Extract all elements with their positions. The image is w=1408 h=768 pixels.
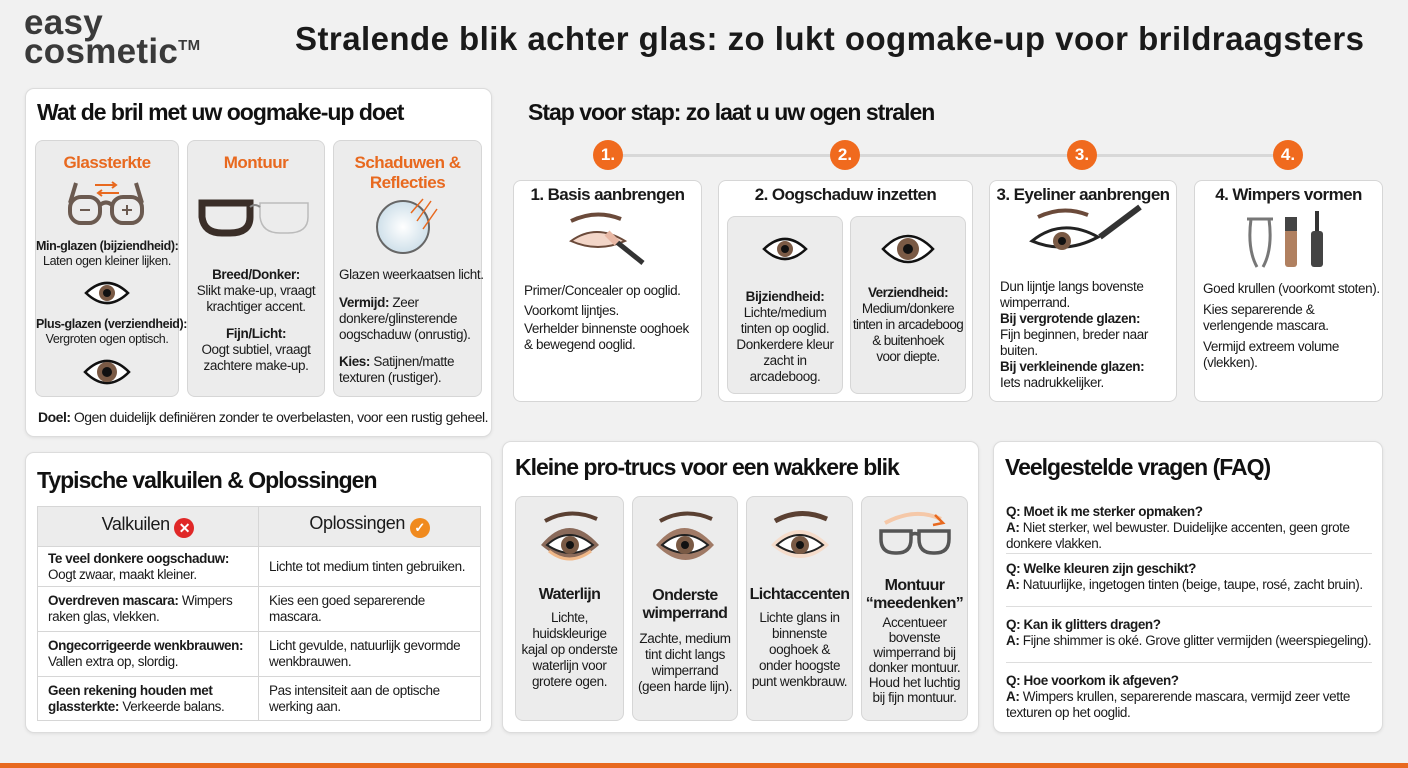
card: waterlijn: Lichte, [551, 610, 588, 625]
card: glassterkte: Min-glazen (bijziendheid): [36, 239, 178, 253]
logo [24, 3, 200, 71]
step numbers [593, 140, 1303, 170]
sub: verziendheid: tinten in arcadeboog [853, 317, 963, 332]
card: waterlijn: huidskleurige [532, 626, 607, 641]
step 4 card [1194, 180, 1383, 402]
card: montuur: Breed/Donker: [212, 267, 300, 282]
step 3 card: Bij vergrotende glazen: [1000, 311, 1140, 326]
text: 4. [1281, 145, 1295, 164]
step 3 card: Iets nadrukkelijker. [1000, 375, 1104, 390]
card: lichtaccenten: ooghoek & [769, 642, 830, 657]
card: montuur meedenken [861, 496, 968, 721]
table: Ongecorrigeerde wenkbrauwen: [48, 638, 243, 653]
faq 4 [1006, 673, 1350, 720]
card: waterlijn: waterlijn voor [533, 658, 606, 673]
card: onderste wimperrand: tint dicht langs [645, 647, 725, 662]
table: raken glas, vlekken. [48, 609, 159, 624]
sub: bijziendheid: Bijziendheid: [746, 289, 824, 304]
card: onderste wimperrand: (geen harde lijn). [638, 679, 732, 694]
panel: valkuilen [25, 452, 492, 733]
panel: FAQ [993, 441, 1383, 733]
card: glassterkte: Glassterkte [63, 153, 151, 172]
card: montuur meedenken: “meedenken” [866, 595, 963, 612]
card: onderste wimperrand: Onderste [652, 587, 718, 604]
card: montuur meedenken: bij fijn montuur. [872, 690, 956, 705]
step 1 card: & bewegend ooglid. [524, 337, 635, 352]
card: onderste wimperrand [632, 496, 738, 721]
card: waterlijn: kajal op onderste [521, 642, 618, 657]
text: 1. [601, 145, 615, 164]
faq 2 [1006, 561, 1363, 592]
heading: Typische valkuilen & Oplossingen [37, 467, 377, 493]
sub: bijziendheid: zacht in [763, 353, 807, 368]
title: Stralende blik achter glas: zo lukt oogmake-up voor brildraagsters [295, 20, 1364, 57]
step 3 card: wimperrand. [1000, 295, 1070, 310]
faq 1: Q: Moet ik me sterker opmaken? [1006, 504, 1203, 519]
card: glassterkte: Laten ogen kleiner lijken. [43, 254, 171, 268]
sub: verziendheid: Verziendheid: [868, 285, 948, 300]
faq 1 [1006, 504, 1350, 551]
card: lichtaccenten [746, 496, 853, 721]
card: schaduwen [333, 140, 482, 397]
table: ✕ [179, 520, 190, 536]
card: schaduwen: texturen (rustiger). [339, 370, 441, 385]
card: waterlijn [515, 496, 624, 721]
card: waterlijn: grotere ogen. [532, 674, 607, 689]
panel: wat de bril doet [25, 88, 492, 437]
card: montuur meedenken: donker montuur. [869, 660, 960, 675]
card: glassterkte: Plus-glazen (verziendheid): [36, 317, 187, 331]
step 1 card: Voorkomt lijntjes. [524, 303, 619, 318]
sub: verziendheid: voor diepte. [876, 349, 940, 364]
card: schaduwen: Kies: Satijnen/matte [339, 354, 454, 369]
table: Oogt zwaar, maakt kleiner. [48, 566, 197, 582]
card: montuur meedenken: Houd het luchtig [869, 675, 960, 690]
card: lichtaccenten: binnenste [772, 626, 827, 641]
table: werking aan. [269, 698, 341, 714]
table: Overdreven mascara: Wimpers [48, 593, 232, 608]
step 4 card: 4. Wimpers vormen [1215, 185, 1362, 204]
table [37, 506, 481, 721]
text: 3. [1075, 145, 1089, 164]
table: Licht gevulde, natuurlijk gevormde [269, 638, 460, 653]
faq 4: Q: Hoe voorkom ik afgeven? [1006, 673, 1179, 688]
card: schaduwen: Vermijd: Zeer [339, 295, 419, 310]
faq 2: A: Natuurlijke, ingetogen tinten (beige, taupe, rosé, zacht bruin). [1006, 577, 1363, 592]
card: schaduwen: Reflecties [370, 173, 445, 192]
card: montuur meedenken: wimperrand bij [873, 645, 956, 660]
table: Kies een goed separerende [269, 593, 425, 608]
table: Pas intensiteit aan de optische [269, 682, 440, 698]
table: Valkuilen [102, 514, 170, 534]
card: montuur [187, 140, 325, 397]
card: glassterkte [35, 140, 179, 397]
faq 3: Q: Kan ik glitters dragen? [1006, 617, 1161, 632]
doel text: Doel: Ogen duidelijk definiëren zonder te overbelasten, voor een rustig geheel. [38, 409, 488, 425]
card: glassterkte: Vergroten ogen optisch. [46, 332, 168, 346]
heading: stappen: Stap voor stap: zo laat u uw ogen stralen [528, 99, 934, 125]
step 3 card: Bij verkleinende glazen: [1000, 359, 1144, 374]
card: montuur: Oogt subtiel, vraagt [201, 342, 311, 357]
card: montuur: Slikt make-up, vraagt [197, 283, 315, 298]
table: Geen rekening houden met [48, 682, 212, 698]
logo: easy [24, 3, 103, 42]
step 1 card [513, 180, 702, 402]
logo: cosmeticTM [24, 32, 200, 71]
bottom bar [0, 763, 1408, 768]
table: Oplossingen [309, 513, 405, 533]
card: lichtaccenten: punt wenkbrauw. [752, 674, 847, 689]
sub: verziendheid [850, 216, 966, 394]
card: schaduwen: Schaduwen & [355, 153, 460, 172]
card: montuur meedenken: bovenste [889, 630, 940, 645]
table: ✓ [414, 520, 425, 535]
sub: bijziendheid: arcadeboog. [750, 369, 820, 384]
step 3 card: Dun lijntje langs bovenste [1000, 279, 1143, 294]
step 3 card: Fijn beginnen, breder naar [1000, 327, 1148, 342]
table: Vallen extra op, slordig. [48, 654, 178, 669]
faq 3 [1006, 617, 1371, 648]
card: schaduwen: oogschaduw (onrustig). [339, 327, 471, 342]
heading: Veelgestelde vragen (FAQ) [1005, 454, 1270, 480]
faq 2: Q: Welke kleuren zijn geschikt? [1006, 561, 1196, 576]
card: schaduwen: Glazen weerkaatsen licht. [339, 267, 484, 282]
card: lichtaccenten: onder hoogste [759, 658, 840, 673]
card: montuur: Fijn/Licht: [226, 326, 286, 341]
step 4 card: verlengende mascara. [1203, 318, 1329, 333]
sub: bijziendheid: Donkerdere kleur [736, 337, 834, 352]
table: glassterkte: Verkeerde balans. [48, 698, 224, 714]
card: lichtaccenten: Lichtaccenten [750, 586, 849, 603]
card: montuur meedenken: Accentueer [882, 615, 947, 630]
sub: verziendheid: & buitenhoek [872, 333, 944, 348]
step 4 card: (vlekken). [1203, 355, 1258, 370]
sub: verziendheid: Medium/donkere [862, 301, 954, 316]
card: montuur meedenken: Montuur [885, 577, 944, 594]
table: Te veel donkere oogschaduw: [48, 550, 229, 566]
sub: bijziendheid: Lichte/medium [744, 305, 826, 320]
step 1 card: Primer/Concealer op ooglid. [524, 283, 681, 298]
card: onderste wimperrand: wimperrand [643, 605, 727, 622]
faq 4: A: Wimpers krullen, separerende mascara, vermijd zeer vette texturen op het ooglid. [1006, 689, 1350, 720]
sub: bijziendheid: tinten op ooglid. [741, 321, 829, 336]
card: montuur: zachtere make-up. [203, 358, 308, 373]
step 3 card: 3. Eyeliner aanbrengen [997, 185, 1169, 204]
step 3 card [989, 180, 1177, 402]
table: wenkbrauwen. [269, 654, 351, 669]
card: montuur: Montuur [224, 153, 288, 172]
card: onderste wimperrand: Zachte, medium [639, 631, 731, 646]
faq 3: A: Fijne shimmer is oké. Grove glitter vermijden (weerspiegeling). [1006, 633, 1371, 648]
sub: bijziendheid [727, 216, 843, 394]
faq 1: A: Niet sterker, wel bewuster. Duidelijke accenten, geen grote donkere vlakken. [1006, 520, 1350, 551]
icon: eye [84, 282, 130, 304]
table: mascara. [269, 609, 321, 624]
step 1 card: 1. Basis aanbrengen [531, 185, 684, 204]
panel: pro-trucs [502, 441, 979, 733]
heading: Kleine pro-trucs voor een wakkere blik [515, 454, 899, 480]
step 2 card: 2. Oogschaduw inzetten [755, 185, 936, 204]
card: onderste wimperrand: wimperrand [652, 663, 718, 678]
icon: eye large [83, 360, 131, 384]
text: 2. [838, 145, 852, 164]
step 4 card: Vermijd extreem volume [1203, 339, 1339, 354]
step 4 card: Goed krullen (voorkomt stoten). [1203, 281, 1380, 296]
card: schaduwen: donkere/glinsterende [339, 311, 457, 326]
step 1 card: Verhelder binnenste ooghoek [524, 321, 689, 336]
card: montuur: krachtiger accent. [206, 299, 306, 314]
heading: Wat de bril met uw oogmake-up doet [37, 99, 403, 125]
table: Lichte tot medium tinten gebruiken. [269, 558, 465, 574]
step 3 card: buiten. [1000, 343, 1038, 358]
step 4 card: Kies separerende & [1203, 302, 1314, 317]
card: lichtaccenten: Lichte glans in [759, 610, 840, 625]
card: waterlijn: Waterlijn [539, 586, 600, 603]
step 2 card [718, 180, 973, 402]
timeline [608, 154, 1288, 157]
